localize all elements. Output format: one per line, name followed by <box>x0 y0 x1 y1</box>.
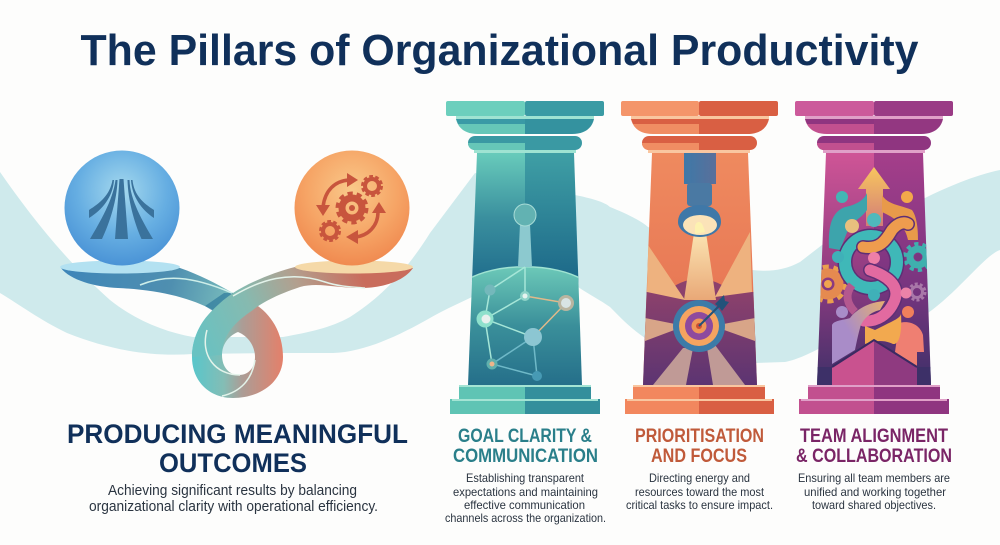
icon: network <box>476 267 574 381</box>
base <box>450 385 600 414</box>
shaft with rays <box>640 153 760 388</box>
balance illustration <box>60 260 413 398</box>
text block: team alignment and collaboration: & COLLABORATION <box>796 446 952 467</box>
text block: prioritisation and focus: AND FOCUS <box>651 446 747 467</box>
text block: producing meaningful outcomes: OUTCOMES <box>159 448 307 478</box>
text block: prioritisation and focus <box>626 426 773 512</box>
text block: producing meaningful outcomes: PRODUCING MEANINGFUL <box>67 419 408 449</box>
icon: target with arrow <box>673 295 729 352</box>
orange arm <box>863 223 908 248</box>
base <box>625 385 774 414</box>
capital <box>621 101 778 153</box>
capital <box>795 101 953 153</box>
text block: goal clarity and communication: Establishing transparent <box>466 471 585 485</box>
text block: prioritisation and focus: critical tasks to ensure impact. <box>626 498 773 512</box>
beam <box>684 226 716 300</box>
orange sphere <box>294 150 410 266</box>
shaft with network <box>465 153 585 385</box>
shaft <box>814 153 934 388</box>
teal ring <box>845 236 897 288</box>
pillar 2: prioritisation <box>621 101 778 414</box>
pillar 3: team alignment <box>795 101 953 414</box>
base <box>799 385 949 414</box>
text block: team alignment and collaboration: unified and working together <box>804 485 946 499</box>
icon: spotlight <box>678 153 721 237</box>
text block: goal clarity and communication: effective communication <box>464 498 585 512</box>
background wave <box>0 170 1000 363</box>
house <box>832 340 874 385</box>
text block: goal clarity and communication: channels across the organization. <box>445 511 606 525</box>
text block: team alignment and collaboration: toward shared objectives. <box>812 498 936 512</box>
lower figures <box>836 306 848 318</box>
pillar 1: goal clarity <box>446 101 604 414</box>
text block: producing meaningful outcomes: organizational clarity with operational efficiency. <box>89 498 378 515</box>
text block: team alignment and collaboration: TEAM ALIGNMENT <box>800 426 948 447</box>
text block: goal clarity and communication: expectations and maintaining <box>453 485 598 499</box>
capital <box>446 101 604 153</box>
text block: producing meaningful outcomes <box>67 419 408 515</box>
text block: goal clarity and communication <box>445 426 606 525</box>
top figures <box>836 191 848 203</box>
text block: goal clarity and communication: COMMUNICATION <box>453 446 598 467</box>
text block: prioritisation and focus: PRIORITISATION <box>635 426 764 447</box>
loop ring <box>192 296 283 398</box>
text block: producing meaningful outcomes: Achieving significant results by balancing <box>108 482 357 499</box>
gears <box>811 244 930 301</box>
icon: people and links <box>811 191 932 385</box>
icon: arrow up <box>858 167 890 226</box>
text block: team alignment and collaboration <box>796 426 952 512</box>
right ribbon and plate <box>192 260 413 396</box>
text block: prioritisation and focus: resources toward the most <box>635 485 765 499</box>
mauve arc <box>848 285 855 312</box>
blue sphere <box>64 150 180 266</box>
text block: team alignment and collaboration: Ensuring all team members are <box>798 471 950 485</box>
text block: goal clarity and communication: GOAL CLARITY & <box>458 426 592 447</box>
title: The Pillars of Organizational Productivity <box>80 26 919 75</box>
icon: pillar fan <box>89 179 154 239</box>
text block: prioritisation and focus: Directing energy and <box>649 471 750 485</box>
pink link <box>868 252 880 264</box>
icon: beacon <box>514 204 536 267</box>
icon: gears and arrows <box>316 173 386 244</box>
left ribbon and plate <box>60 260 234 311</box>
